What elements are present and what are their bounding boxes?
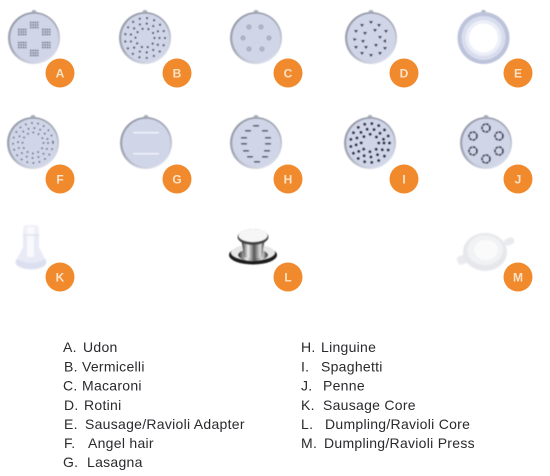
legend: left column: Angel hair — [88, 435, 154, 451]
legend: left column: Macaroni — [82, 378, 142, 394]
badge G: G — [172, 172, 182, 186]
legend: left column: E. — [64, 416, 78, 432]
ring E: Sausage/Ravioli Adapter — [458, 10, 510, 64]
legend: left column: Vermicelli — [82, 358, 145, 374]
badge E: E — [514, 66, 522, 80]
legend: left column: Lasagna — [87, 454, 143, 470]
legend: right column: L. — [301, 416, 313, 432]
badge K: K — [56, 270, 65, 284]
legend: left column: B. — [64, 358, 78, 374]
badge E — [504, 58, 532, 88]
disc H: Linguine — [230, 115, 282, 169]
legend: right column — [301, 339, 475, 451]
legend: right column: Penne — [323, 378, 365, 394]
legend: left column: Rotini — [84, 397, 121, 413]
disc D: Rotini — [345, 10, 397, 64]
disc A: Udon — [8, 10, 60, 64]
badge L: L — [284, 270, 292, 284]
disc B: Vermicelli — [119, 10, 171, 64]
legend: left column: G. — [63, 454, 78, 470]
badge M: M — [513, 270, 523, 284]
disc G: Lasagna — [120, 115, 172, 169]
badge H — [274, 164, 302, 194]
legend: right column: Linguine — [321, 339, 376, 355]
badge I: I — [402, 172, 406, 186]
badge B — [162, 58, 192, 88]
legend: right column: J. — [301, 378, 312, 394]
legend: left column: Sausage/Ravioli Adapter — [85, 416, 245, 432]
badge C — [274, 58, 302, 88]
badge F — [46, 164, 74, 194]
badge C: C — [284, 66, 293, 80]
legend: left column: C. — [63, 378, 78, 394]
legend: right column: M. — [301, 435, 317, 451]
badge G — [162, 164, 192, 194]
badge A — [46, 58, 74, 88]
badge K — [46, 262, 74, 292]
legend: right column: Dumpling/Ravioli Core — [325, 416, 470, 432]
badge A: A — [56, 66, 65, 80]
legend: right column: Spaghetti — [321, 358, 383, 374]
disc J: Penne — [460, 115, 512, 169]
badge J — [504, 164, 532, 194]
badge D: D — [400, 66, 409, 80]
legend: right column: Dumpling/Ravioli Press — [324, 435, 475, 451]
icon M: Dumpling/Ravioli Press — [456, 233, 515, 271]
disc I: Spaghetti — [344, 115, 396, 169]
legend: right column: K. — [301, 397, 315, 413]
disc F: Angel hair — [7, 115, 59, 169]
legend: right column: H. — [301, 339, 316, 355]
legend: right column: Sausage Core — [323, 397, 416, 413]
badge H: H — [284, 172, 292, 186]
legend: left column — [63, 339, 245, 470]
legend: right column: I. — [301, 358, 309, 374]
badge I — [390, 164, 418, 194]
badge B: B — [173, 66, 182, 80]
badge M — [504, 262, 532, 292]
legend: left column: A. — [63, 339, 77, 355]
legend: left column: Udon — [83, 339, 118, 355]
badge F: F — [56, 172, 64, 186]
badge D — [390, 58, 418, 88]
icon L: Dumpling/Ravioli Core — [229, 229, 277, 264]
badge L — [274, 262, 302, 292]
disc C: Macaroni — [230, 10, 282, 64]
legend: left column: D. — [64, 397, 79, 413]
legend: left column: F. — [64, 435, 75, 451]
icon K: Sausage Core — [16, 225, 46, 270]
badge J: J — [515, 172, 521, 186]
